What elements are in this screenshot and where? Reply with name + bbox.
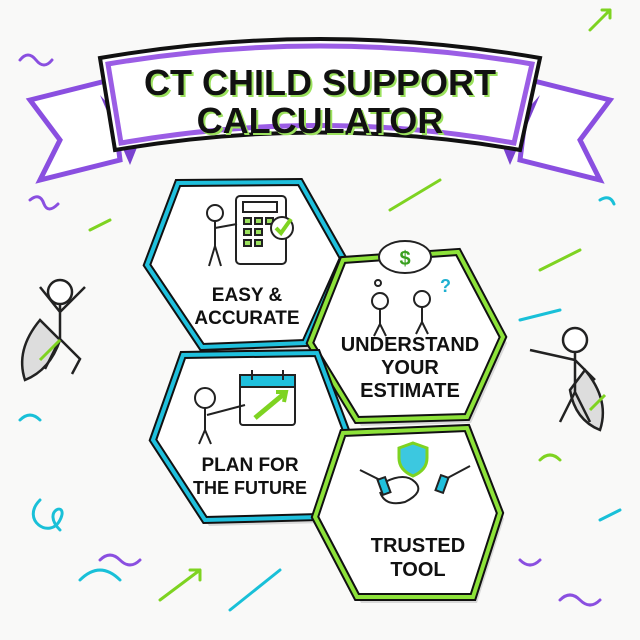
text: easy & accurate: EASY & <box>212 285 282 306</box>
text: understand your estimate: UNDERSTAND <box>341 334 479 356</box>
icon: calculator <box>207 196 293 266</box>
title text <box>144 62 498 143</box>
panel: trusted tool: TOOL <box>390 559 446 581</box>
panel: trusted tool <box>315 428 500 597</box>
title text: CALCULATOR <box>199 102 445 143</box>
title text: CALCULATOR <box>197 100 443 141</box>
icon: thinking people with dollar: ? <box>440 276 451 296</box>
icon: calendar with arrow <box>195 370 295 444</box>
title text: CT CHILD SUPPORT <box>144 62 496 103</box>
figure: left superhero <box>22 280 85 380</box>
title banner <box>30 39 610 180</box>
figure: right superhero <box>530 328 605 430</box>
text: plan for the future: PLAN FOR <box>201 455 299 476</box>
title text: CT CHILD SUPPORT <box>146 64 498 105</box>
panel: easy & accurate: ACCURATE <box>194 308 300 329</box>
panel: plan for the future: THE FUTURE <box>193 478 307 498</box>
icon: thinking people with dollar: $ <box>399 248 411 270</box>
panel: understand your estimate: ESTIMATE <box>360 380 460 402</box>
panel: plan for the future <box>153 353 347 520</box>
icon: thinking people with dollar <box>372 241 451 336</box>
text: trusted tool: TRUSTED <box>371 535 465 557</box>
panel: easy & accurate <box>147 182 343 347</box>
icon: shield and handshake <box>360 443 470 503</box>
panel: understand your estimate: YOUR <box>381 357 439 379</box>
panel: understand your estimate <box>310 241 503 420</box>
hexagon shadows <box>151 188 507 603</box>
